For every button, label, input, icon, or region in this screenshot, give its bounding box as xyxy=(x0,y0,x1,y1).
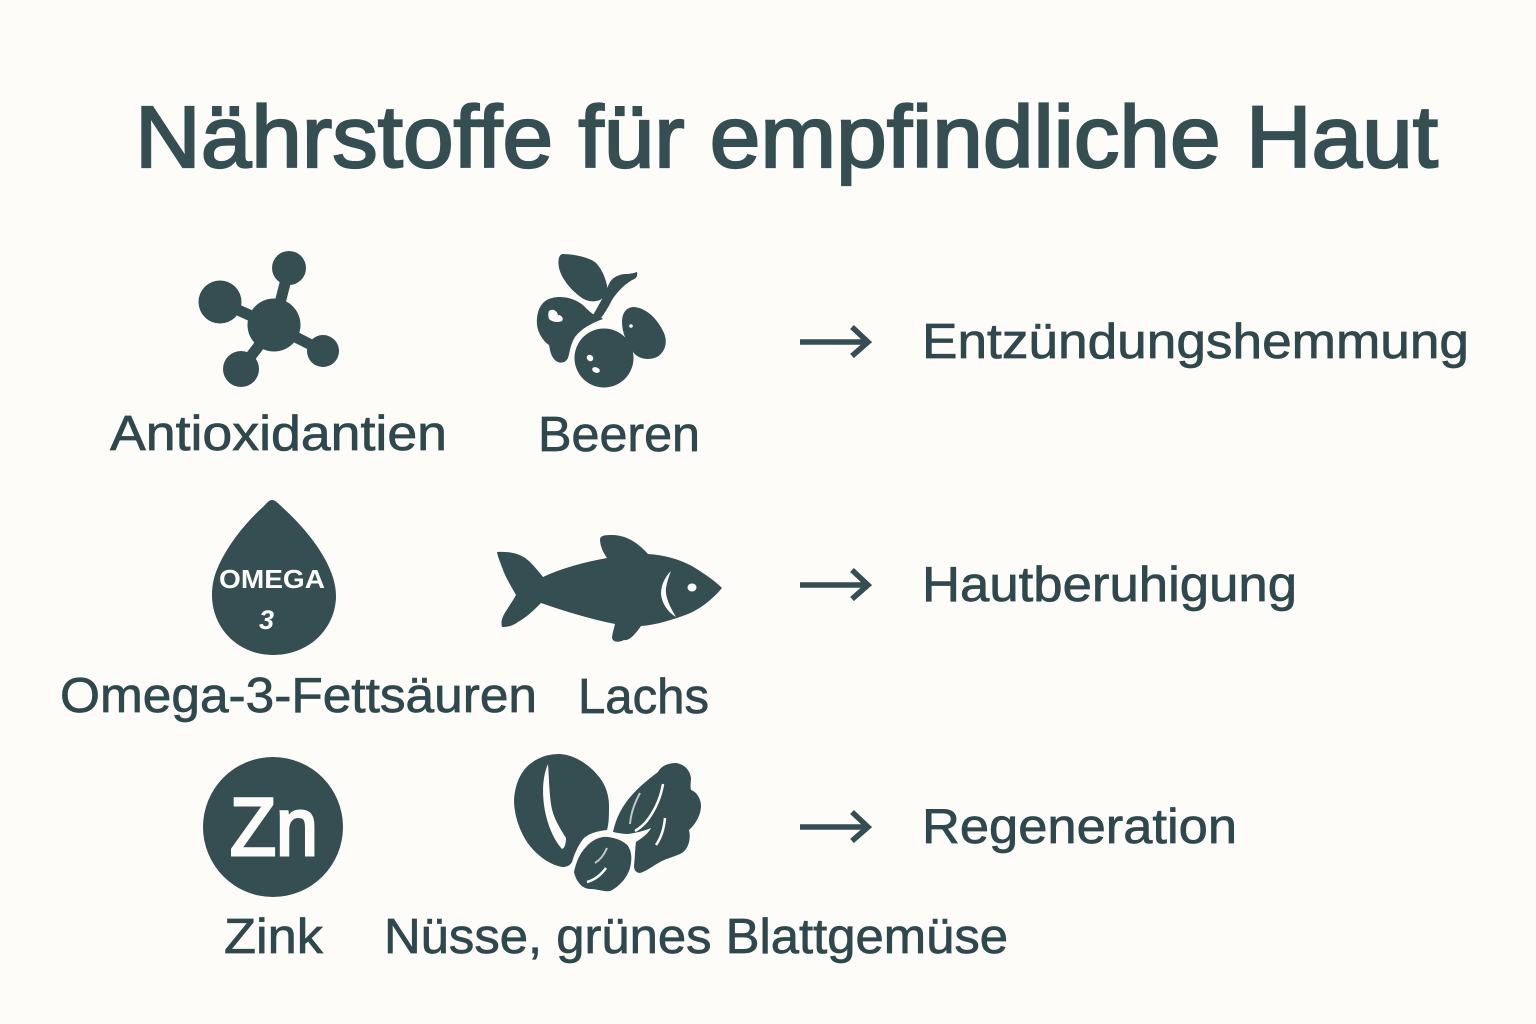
row: omega-3 xyxy=(60,500,1297,724)
icon: berries xyxy=(537,254,666,388)
icon: nuts and leafy greens xyxy=(514,754,701,891)
label: Regeneration: Regeneration xyxy=(922,800,1237,854)
row: antioxidants xyxy=(110,251,1469,462)
label: Beeren: Beeren xyxy=(538,408,700,462)
row: zinc xyxy=(203,754,1237,964)
icon: zinc circle xyxy=(203,757,343,897)
icon: omega drop: OMEGA xyxy=(219,564,325,594)
label: Omega-3-Fettsäuren: Omega-3-Fettsäuren xyxy=(60,669,537,723)
arrow xyxy=(800,812,868,841)
label: Nüsse, grünes Blattgemüse: Nüsse, grünes Blattgemüse xyxy=(384,910,1008,964)
berry highlights xyxy=(548,310,633,374)
title: Nährstoffe für empfindliche Haut xyxy=(135,89,1438,186)
icon: molecule xyxy=(198,251,339,387)
label: Hautberuhigung: Hautberuhigung xyxy=(922,558,1297,612)
icon: omega drop: 3 xyxy=(259,605,274,635)
arrow xyxy=(800,570,868,599)
arrow xyxy=(800,327,868,356)
label: Entzündungshemmung: Entzündungshemmung xyxy=(922,315,1469,369)
icon: fish xyxy=(497,535,722,642)
label: Antioxidantien: Antioxidantien xyxy=(110,407,447,461)
icon: omega drop xyxy=(212,500,336,655)
label: Lachs: Lachs xyxy=(578,670,709,724)
icon: zinc circle: Zn xyxy=(230,782,318,873)
label: Zink: Zink xyxy=(224,910,324,964)
